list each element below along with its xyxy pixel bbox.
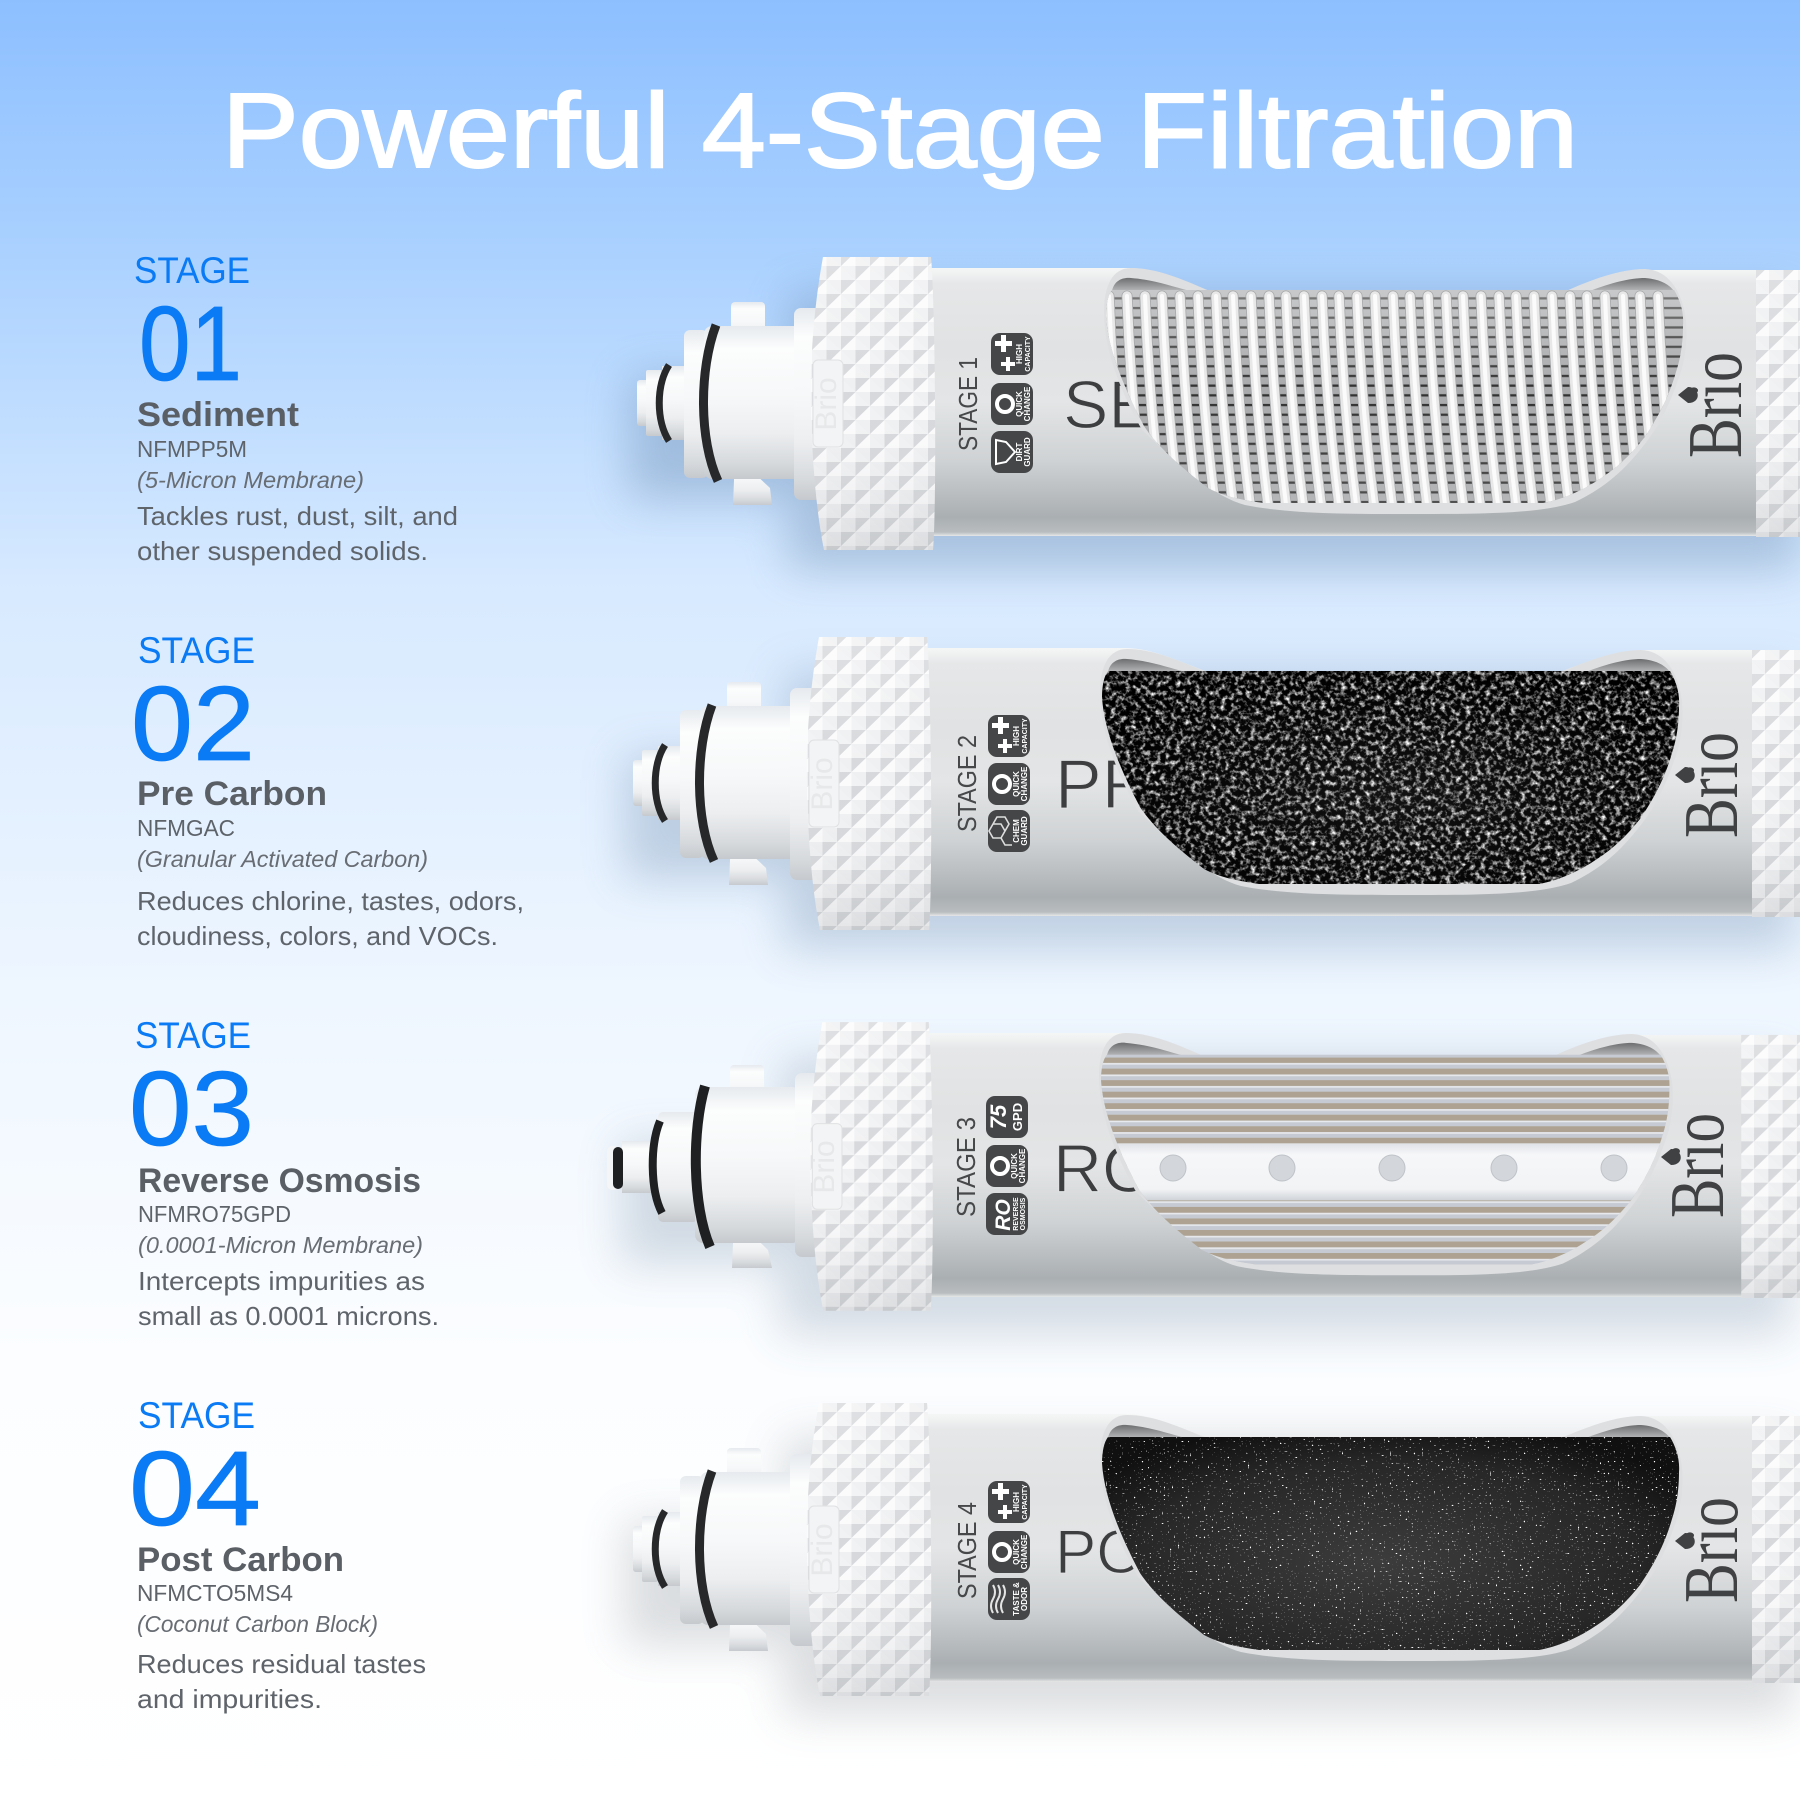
stage label: STAGE 4	[952, 1502, 982, 1599]
stage 1 part code: NFMPP5M	[137, 436, 247, 462]
badge: high capacity: HIGH	[1012, 1492, 1021, 1512]
panel: stage 3 text	[129, 1015, 439, 1331]
badge: high capacity: CAPACITY	[1025, 336, 1032, 372]
badge: 75 GPD: 75	[986, 1104, 1011, 1129]
stage 4 eyebrow: STAGE	[138, 1395, 255, 1436]
badge: 75 GPD: GPD	[1010, 1103, 1025, 1131]
embossed mark: Brio	[806, 757, 839, 811]
badge: reverse osmosis: REVERSE	[1013, 1197, 1020, 1231]
badge: high capacity	[988, 1481, 1030, 1523]
logo water drop	[1675, 767, 1695, 783]
badge: quick change	[986, 1145, 1028, 1187]
stage 1 name: Sediment	[137, 396, 299, 434]
stage 1 number: 01	[139, 285, 242, 403]
stage 1 eyebrow: STAGE	[134, 250, 250, 291]
brio logo: Brio	[1668, 1497, 1754, 1603]
brio logo: Brio	[1654, 1113, 1740, 1218]
badge: quick change: QUICK	[1012, 1539, 1021, 1565]
tube and collar	[807, 637, 1800, 930]
badge: taste and odor: TASTE &	[1012, 1582, 1021, 1616]
stage 2 media note: (Granular Activated Carbon)	[137, 846, 428, 872]
badge: high capacity: CAPACITY	[1022, 718, 1029, 754]
connector	[607, 1065, 820, 1268]
stage 2 part code: NFMGAC	[137, 815, 235, 841]
filter window	[1096, 1415, 1696, 1667]
embossed mark: Brio	[808, 1140, 841, 1194]
badge: chem guard: CHEM	[1012, 819, 1021, 843]
stage 2 description: Reduces chlorine, tastes, odors,	[137, 886, 524, 916]
stage 2 eyebrow: STAGE	[138, 630, 255, 671]
product name: SED	[1063, 367, 1203, 443]
badge: dirt guard: GUARD	[1023, 437, 1032, 467]
badge: high capacity: HIGH	[1012, 726, 1021, 746]
badge: quick change: CHANGE	[1020, 1534, 1029, 1569]
product name: POS	[1055, 1518, 1186, 1587]
cartridge shadow	[620, 1057, 1790, 1335]
stage 4 part code: NFMCTO5MS4	[137, 1580, 293, 1606]
badge: high capacity	[988, 715, 1030, 757]
stage 1 media note: (5-Micron Membrane)	[137, 467, 364, 493]
stage 4 media note: (Coconut Carbon Block)	[137, 1611, 378, 1637]
badge: taste and odor: ODOR	[1020, 1587, 1029, 1611]
badge: high capacity: HIGH	[1015, 344, 1024, 364]
badge: reverse osmosis: RO	[992, 1199, 1015, 1231]
cartridge shadow	[624, 1438, 1794, 1716]
cartridge shadow	[628, 292, 1798, 570]
panel: stage 1 text	[134, 250, 458, 566]
badge: quick change: QUICK	[1012, 771, 1021, 797]
badge: quick change: QUICK	[1010, 1153, 1019, 1179]
panel: stage 3 filter cartridge	[607, 1022, 1800, 1335]
connector	[633, 682, 818, 885]
tube and collar	[811, 257, 1800, 550]
filter window	[1096, 649, 1696, 901]
panel: stage 4 filter cartridge	[624, 1403, 1800, 1716]
stage 3 media note: (0.0001-Micron Membrane)	[138, 1232, 423, 1258]
stage 3 eyebrow: STAGE	[135, 1015, 251, 1056]
stage label: STAGE 2	[952, 735, 982, 832]
badge: reverse osmosis: OSMOSIS	[1020, 1197, 1027, 1230]
badge: dirt guard: DIRT	[1015, 443, 1024, 461]
membrane perforations	[1160, 1155, 1627, 1181]
badge: quick change: CHANGE	[1018, 1148, 1027, 1183]
stage 1 description: other suspended solids.	[137, 536, 428, 566]
logo water drop	[1678, 387, 1698, 403]
tube and collar	[807, 1403, 1800, 1696]
badge: 75 GPD	[986, 1096, 1028, 1138]
panel: stage 2 text	[131, 630, 524, 951]
stage 4 number: 04	[129, 1430, 261, 1548]
badge: dirt guard	[991, 431, 1033, 473]
stage 4 description: and impurities.	[137, 1684, 322, 1714]
badge: quick change: CHANGE	[1023, 386, 1032, 421]
stage 2 description: cloudiness, colors, and VOCs.	[137, 921, 498, 951]
badge: quick change: QUICK	[1015, 391, 1024, 417]
badge: reverse osmosis	[986, 1193, 1028, 1235]
stage 3 description: Intercepts impurities as	[138, 1266, 425, 1296]
badge: taste and odor	[988, 1578, 1030, 1620]
badge: quick change	[991, 383, 1033, 425]
embossed mark: Brio	[806, 1523, 839, 1577]
logo water drop	[1661, 1149, 1681, 1165]
cartridge shadow	[624, 672, 1794, 950]
badge: high capacity	[991, 333, 1033, 375]
stage 2 number: 02	[131, 665, 255, 783]
tube and collar	[810, 1022, 1800, 1311]
stage 3 description: small as 0.0001 microns.	[138, 1301, 439, 1331]
badge: chem guard: GUARD	[1020, 816, 1029, 846]
title: Powerful 4-Stage Filtration	[222, 72, 1578, 190]
filter window	[1095, 1033, 1686, 1284]
stage 4 name: Post Carbon	[137, 1541, 344, 1579]
connector	[633, 1448, 818, 1651]
panel: stage 1 filter cartridge	[628, 257, 1800, 570]
badge: quick change	[988, 763, 1030, 805]
panel: stage 4 text	[129, 1395, 426, 1714]
embossed mark: Brio	[810, 377, 843, 431]
brio logo: Brio	[1668, 732, 1754, 838]
stage 3 name: Reverse Osmosis	[138, 1162, 421, 1200]
filter window	[1100, 268, 1700, 520]
badge: quick change: CHANGE	[1020, 766, 1029, 801]
panel: stage 2 filter cartridge	[624, 637, 1800, 950]
logo water drop	[1675, 1533, 1695, 1549]
stage 3 number: 03	[129, 1050, 254, 1168]
badge: high capacity: CAPACITY	[1022, 1484, 1029, 1520]
stage label: STAGE 1	[953, 357, 983, 451]
stage 4 description: Reduces residual tastes	[137, 1649, 426, 1679]
product name: RO	[1053, 1131, 1155, 1207]
badge: chem guard	[988, 810, 1030, 852]
stage 1 description: Tackles rust, dust, silt, and	[137, 501, 458, 531]
connector	[637, 302, 822, 505]
stage 3 part code: NFMRO75GPD	[138, 1201, 291, 1227]
stage 2 name: Pre Carbon	[137, 775, 327, 813]
brio logo: Brio	[1672, 352, 1758, 458]
stage label: STAGE 3	[951, 1117, 981, 1217]
badge: quick change	[988, 1531, 1030, 1573]
product name: PRE	[1055, 745, 1199, 823]
